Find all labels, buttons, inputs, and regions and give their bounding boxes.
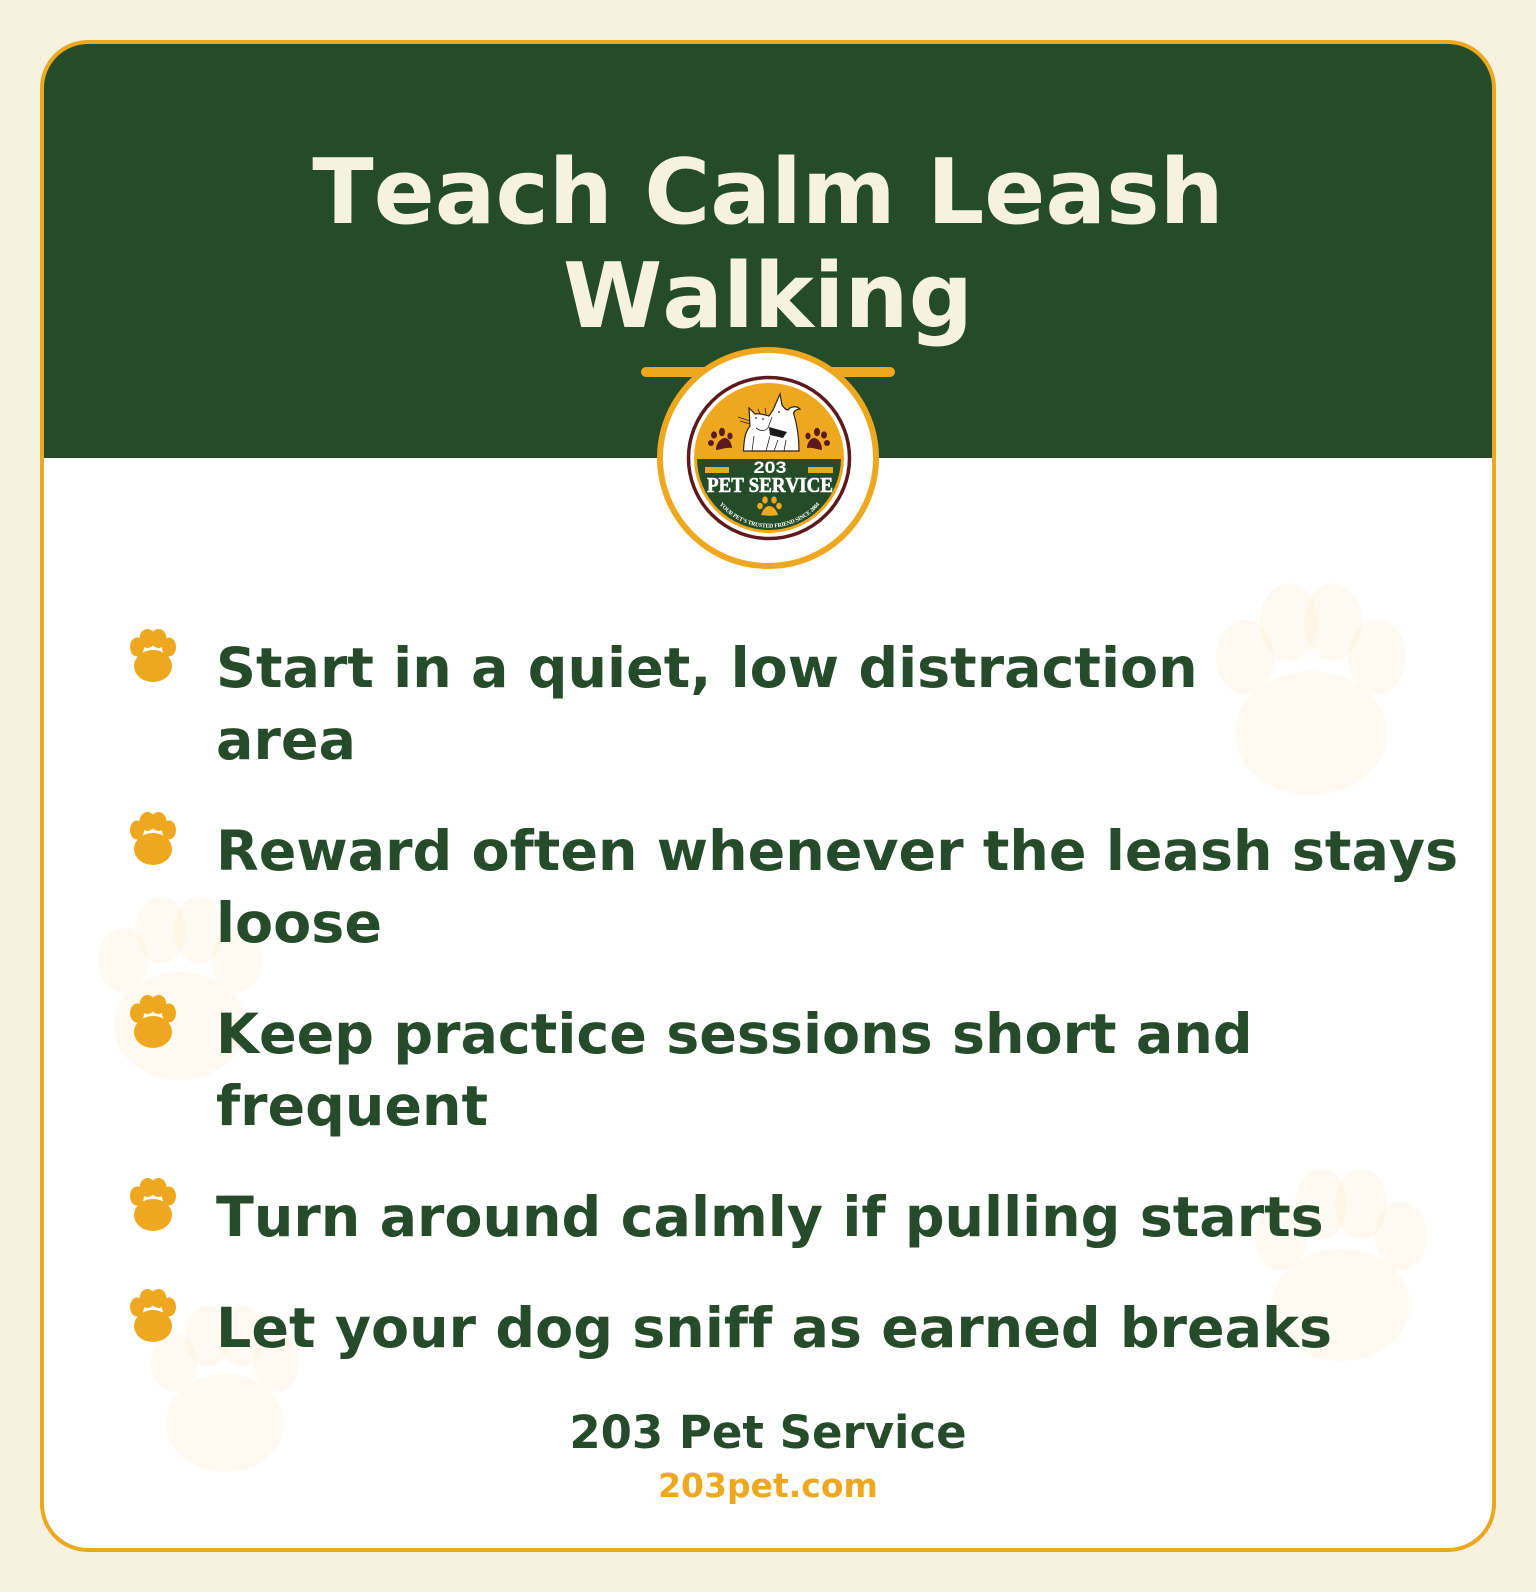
list item 3: frequent xyxy=(216,1074,488,1139)
logo: bars and name: PET SERVICE xyxy=(707,473,833,497)
background paw lower right xyxy=(1255,1169,1427,1361)
list item 3: Keep practice sessions short and xyxy=(216,1002,1253,1067)
background paw left xyxy=(98,896,262,1080)
title: Teach Calm Leash xyxy=(312,140,1224,245)
list item 5: Let your dog sniff as earned breaks xyxy=(216,1296,1332,1361)
list item 4: Turn around calmly if pulling starts xyxy=(216,1185,1324,1250)
logo: tagline: YOUR PET'S TRUSTED FRIEND SINCE 2004 xyxy=(720,502,820,528)
list item 1: area xyxy=(216,708,356,773)
logo: cat and dog xyxy=(738,394,800,451)
footer brand name: 203 Pet Service xyxy=(569,1406,967,1459)
header band xyxy=(42,42,1494,458)
list item 2: Reward often whenever the leash stays xyxy=(216,819,1458,884)
logo: maroon paws xyxy=(708,428,830,450)
background paw top right xyxy=(1216,584,1406,795)
logo: bars and name: 203 xyxy=(754,458,786,477)
title xyxy=(312,140,1224,349)
list item 3 xyxy=(130,995,1253,1139)
list item 1 xyxy=(130,629,1198,773)
title underline xyxy=(641,367,895,377)
list item 2: loose xyxy=(216,891,382,956)
list item 2 xyxy=(130,812,1458,956)
background paw bottom left xyxy=(151,1306,299,1472)
list item 1: Start in a quiet, low distraction xyxy=(216,636,1198,701)
logo badge xyxy=(657,347,879,569)
logo: small orange paw xyxy=(757,496,782,516)
footer website: 203pet.com xyxy=(658,1466,878,1505)
logo: bars and name xyxy=(705,458,833,497)
title: Walking xyxy=(563,244,973,349)
